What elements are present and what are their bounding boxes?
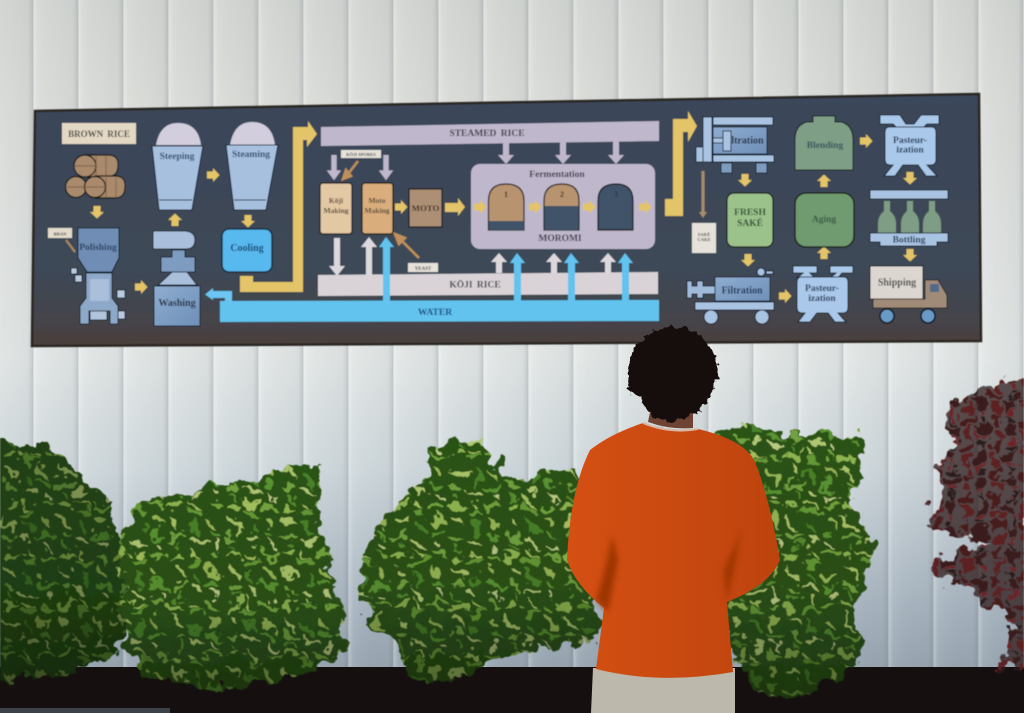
band: steamed rice [321,121,659,146]
icon: washing machine: Washing [158,298,196,309]
icon: steeping vat: Steeping [160,152,195,162]
arrow: fresh sake to filtration [741,254,755,266]
arrow: blending to pasteurization [860,134,872,148]
label: sake cake: SAKÉ [698,232,710,237]
tank: blending [795,116,853,170]
arrow: filtration to fresh sake [738,174,752,186]
arrow: polishing to washing [135,280,148,294]
arrow: steeping to steaming [207,168,220,182]
label: koji spores [341,150,381,158]
arrow: sake cake [699,171,707,218]
vessel 2 [544,184,579,230]
icon: second filtration [687,268,774,324]
collar [643,423,698,431]
icon: pasteurization upper: Pasteur- [893,136,927,146]
icon: polishing machine [71,228,125,324]
icon: pasteurization lower [793,266,853,322]
box: koji making [320,183,352,234]
icon: bottling [870,190,948,246]
arrows: water blue [379,237,633,301]
icon: pasteurization lower: ization [808,294,836,304]
band: steamed rice: STEAMED RICE [449,129,525,139]
shrub: right of figure [712,425,872,698]
neck [648,412,693,428]
box: koji making: Making [323,206,349,215]
box: fresh sake: SAKÉ [737,217,763,229]
icon: rice bags [66,155,125,198]
arrow: aging to blending [817,174,831,187]
icon: pasteurization lower: Pasteur- [805,284,839,294]
arrow: water return [205,288,232,301]
box: moto: MOTO [412,203,440,213]
box: cooling [222,229,272,272]
arrow: washing to steeping [168,214,182,226]
vessel 3 [598,184,633,230]
heading: fermentation: Fermentation [529,170,585,180]
box: koji making: Kōji [329,196,343,205]
vessel 1 [488,184,524,230]
label: yeast [408,263,438,272]
band: water: WATER [418,308,452,318]
icon: washing machine [153,231,200,326]
label: bran [48,228,72,238]
vessel 3: 3 [614,190,618,199]
label: sake cake [692,223,716,253]
arrow: yellow pipe to steamed rice [240,121,317,292]
panel: sake process mural board [32,94,981,346]
box: aging: Aging [812,215,836,225]
arrow: bran line [66,240,75,252]
icon: steeping vat [152,123,203,210]
icon: shipping truck [870,266,947,323]
shirt fold shading [596,530,742,612]
label: sake cake: CAKE [697,237,711,242]
arrow: bottling to shipping [903,249,917,262]
curly hair [628,327,718,420]
label: brown rice: BROWN RICE [68,129,130,139]
band: koji rice [318,272,658,296]
tank: blending: Blending [807,141,843,151]
shrub: centre [362,439,597,682]
band: water [220,300,659,322]
label: moromi: MOROMI [538,234,582,244]
label: bran: BRAN [54,232,67,236]
icon: steaming vat: Steaming [232,150,270,160]
shorts [591,668,735,713]
dark ground strip [0,667,1024,713]
vessel 1: 1 [504,190,508,199]
arrow: moto to fermentation [445,198,465,216]
label: koji spores: KŌJI SPORES [346,152,376,157]
arrow: yeast [395,234,419,258]
arrow: koji spores [343,161,358,179]
label: brown rice [62,123,136,144]
icon: shipping truck: Shipping [878,278,916,288]
box: moto [409,189,442,227]
icon: steaming vat [226,122,278,210]
arrow: yellow pipe to filtration [665,111,697,216]
arrow: moto making to moto [395,200,408,214]
arrow: steaming to cooling [241,215,255,228]
arrow: rice to polishing [90,206,104,218]
arrows: steamed rice down [327,141,624,180]
box: moto making: Moto [368,196,386,205]
label: yeast: YEAST [415,267,432,272]
box: moto making [362,183,393,234]
arrow: pasteurization to aging [817,246,831,259]
shrub: left centre [120,465,346,688]
icon: pasteurization upper [880,115,939,176]
plant: red maple [930,378,1024,668]
icon: first filtration: Filtration [722,136,764,146]
box: fresh sake [727,193,773,247]
icon: polishing machine: Polishing [79,243,117,253]
shrub: far left [0,444,128,678]
icon: first filtration [696,117,774,173]
icon: second filtration: Filtration [721,286,763,296]
band: koji rice: KŌJI RICE [449,278,501,290]
arrows: fermentation flow [474,200,652,214]
box: aging [795,193,854,247]
box: fresh sake: FRESH [734,208,766,218]
vessel 2: 2 [560,190,564,199]
orange shirt [567,423,780,678]
arrows: koji rice white [329,237,616,276]
figure: person from behind [567,327,780,713]
icon: pasteurization upper: ization [896,146,924,156]
icon: bottling: Bottling [893,236,926,246]
panel: fermentation moromi [471,164,655,249]
arrow: pasteurization to bottling [903,172,917,184]
box: moto making: Making [364,206,390,215]
arrow: filtration to pasteurization [779,289,792,303]
box: cooling: Cooling [230,243,264,254]
